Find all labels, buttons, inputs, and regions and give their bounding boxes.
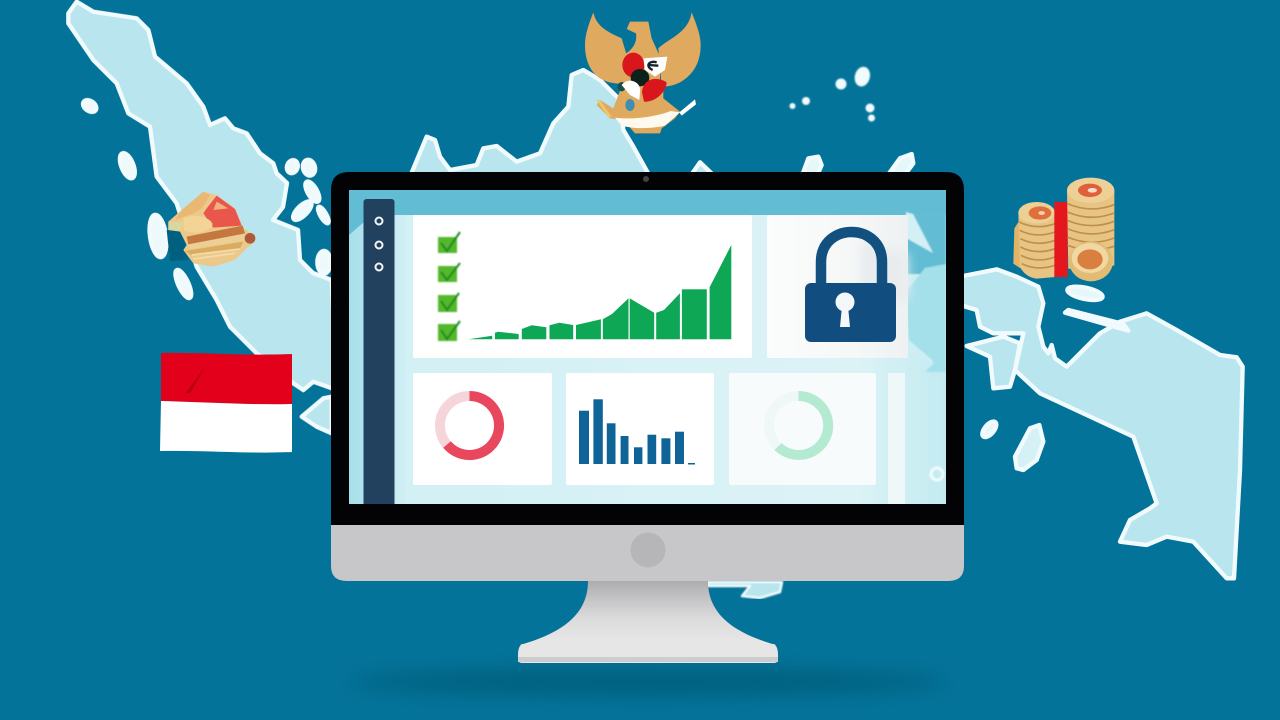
panel: green donut: [729, 373, 876, 485]
map: Papua: [960, 269, 1243, 578]
icon: coin stacks: [1013, 178, 1114, 281]
chin button: [630, 532, 666, 568]
monitor bezel: [331, 172, 964, 525]
screen: dashboard: [349, 190, 946, 504]
monitor base: [518, 644, 778, 663]
panel: blue bar chart: [566, 373, 714, 485]
sidebar dots: [376, 218, 382, 270]
map: small islands: [790, 65, 875, 122]
shadow under monitor: [348, 668, 948, 696]
sidebar: [364, 199, 394, 509]
icon: padlock: [805, 232, 896, 342]
panel: growth chart: [413, 215, 752, 358]
map: Sumatra: [68, 2, 337, 433]
map: Kalimantan and Sulawesi: [410, 70, 913, 177]
screen shaded strip: [888, 373, 905, 505]
webcam: [643, 176, 649, 182]
monitor: [331, 172, 964, 663]
checklist icons: [438, 232, 460, 341]
monitor stand: [520, 581, 776, 645]
donut chart: red: [440, 396, 499, 455]
screen map reflection left: [349, 190, 364, 235]
monitor chin: [331, 525, 964, 581]
screen map reflection right: [905, 212, 946, 480]
bar chart: [579, 399, 695, 464]
donut chart: green: [769, 396, 828, 455]
sea shadow patch: [167, 230, 188, 261]
screen background: [349, 190, 946, 504]
screen top band: [349, 190, 946, 215]
panel: red donut: [413, 373, 552, 485]
icon: Indonesian flag: [160, 353, 292, 453]
map: island under monitor: [708, 582, 782, 598]
icon: Garuda emblem: [585, 12, 701, 133]
lock shadow: [860, 240, 908, 300]
panel: security lock: [767, 215, 908, 358]
green area bars: [468, 245, 731, 339]
icon: traditional food: [167, 192, 255, 267]
